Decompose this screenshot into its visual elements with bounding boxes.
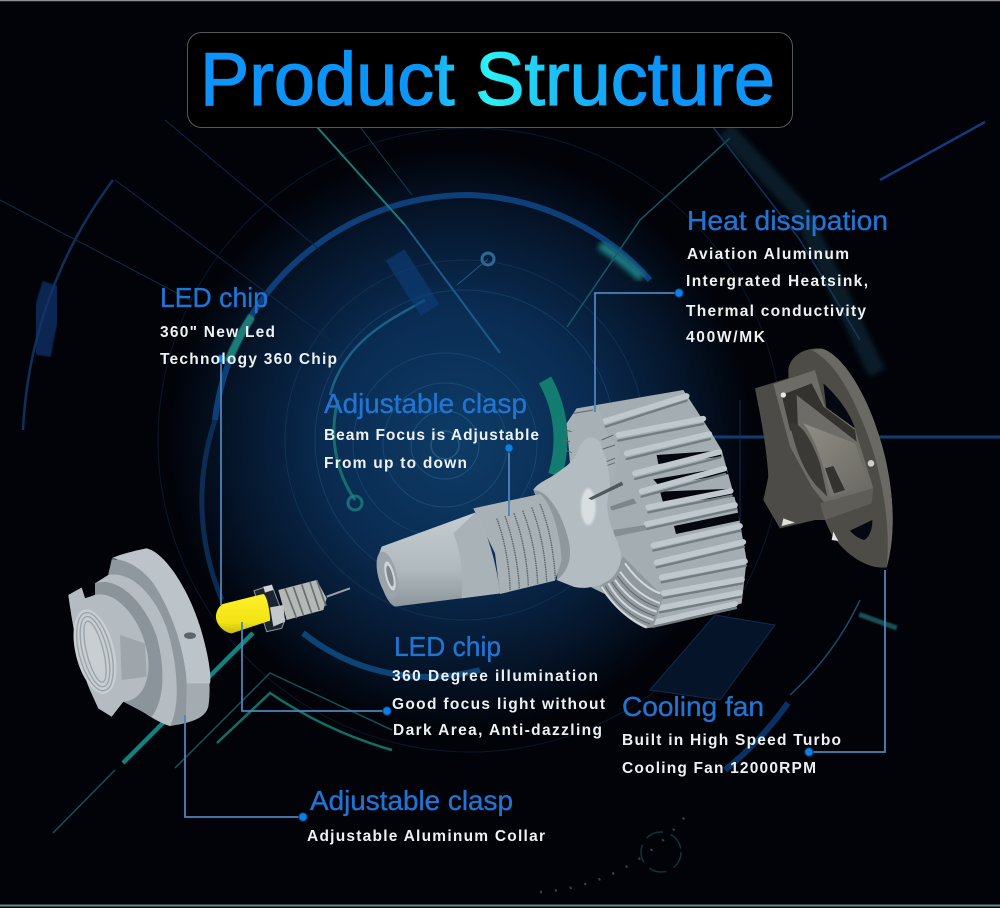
label: Adjustable clasp lower	[307, 785, 545, 845]
label: Adjustable clasp upper: Adjustable clasp	[324, 388, 527, 419]
label: Adjustable clasp lower: Adjustable clasp	[310, 785, 513, 816]
label: Heat dissipation: Intergrated Heatsink,	[686, 273, 868, 290]
heatsink fins	[603, 396, 746, 627]
label: Cooling fan: Cooling Fan 12000RPM	[622, 760, 816, 777]
label: Cooling fan: Built in High Speed Turbo	[622, 732, 841, 749]
label: Adjustable clasp upper: From up to down	[324, 455, 467, 472]
part: cooling fan	[755, 348, 893, 568]
title box	[188, 32, 792, 128]
heatsink upper-left bumps	[567, 408, 620, 480]
label: LED chip lower	[392, 631, 605, 739]
label: Adjustable clasp upper: Beam Focus is Adjustable	[324, 427, 539, 444]
nozzle	[377, 513, 500, 607]
heatsink gaps	[653, 451, 739, 534]
label: LED chip lower: Good focus light without	[392, 696, 605, 713]
collar face	[112, 548, 210, 683]
heatsink lower-left curved fins	[600, 557, 663, 628]
label: LED chip top: Technology 360 Chip	[160, 351, 337, 368]
fan bracket	[755, 370, 872, 528]
label: Heat dissipation: Heat dissipation	[687, 205, 888, 236]
label: Heat dissipation	[686, 205, 888, 346]
connector lines	[185, 293, 885, 817]
label: Heat dissipation: Thermal conductivity	[686, 303, 866, 320]
part: LED chip bulb	[216, 580, 350, 633]
label: Cooling fan: Cooling fan	[622, 691, 764, 722]
label: Heat dissipation: 400W/MK	[686, 329, 766, 346]
label: LED chip top: 360" New Led	[160, 324, 275, 341]
label: Adjustable clasp lower: Adjustable Aluminum Collar	[307, 828, 545, 845]
label: LED chip top	[160, 282, 337, 368]
title: Product Structure	[200, 37, 775, 121]
heatsink backing	[533, 390, 747, 628]
part: heatsink body	[372, 390, 747, 628]
threaded section	[473, 494, 562, 594]
label: LED chip lower: LED chip	[394, 631, 501, 662]
label: LED chip lower: Dark Area, Anti-dazzling	[393, 722, 602, 739]
hub	[533, 437, 621, 588]
label: LED chip lower: 360 Degree illumination	[392, 668, 598, 685]
collar front	[68, 588, 148, 717]
label: LED chip top: LED chip	[160, 282, 268, 313]
connector dots	[217, 289, 813, 821]
fan plate	[788, 348, 893, 568]
label: Cooling fan	[622, 691, 841, 777]
neck collar	[533, 490, 570, 580]
label: Heat dissipation: Aviation Aluminum	[687, 246, 849, 263]
label: Adjustable clasp upper	[324, 388, 539, 472]
part: collar	[66, 548, 210, 726]
